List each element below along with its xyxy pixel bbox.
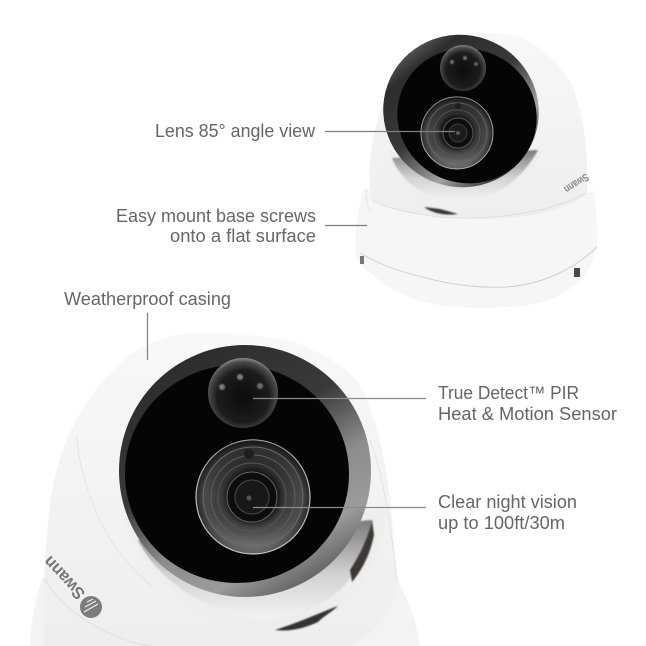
large metal ring — [119, 345, 371, 597]
leader line: weatherproof casing — [146, 313, 148, 360]
Swann logo on large camera: Swann — [40, 552, 89, 603]
brand text on small camera: Swann — [561, 170, 591, 195]
large PIR sensor dome — [208, 358, 278, 428]
camera lens — [421, 97, 493, 169]
PIR sensor dome — [440, 45, 486, 91]
large housing lower band — [126, 510, 385, 636]
large camera mount base — [30, 577, 420, 646]
leader line: lens angle — [325, 130, 455, 132]
metal ring — [362, 13, 560, 209]
large black lens panel — [125, 365, 349, 583]
large camera lens — [196, 440, 310, 554]
label: easy mount base: onto a flat surface — [170, 226, 316, 246]
label: easy mount base: Easy mount base screws — [116, 206, 316, 226]
dome shell — [369, 33, 587, 219]
label: lens angle: Lens 85° angle view — [155, 121, 316, 141]
label: night vision — [438, 492, 577, 533]
large dome shell — [44, 333, 397, 646]
leader line: PIR sensor — [253, 398, 426, 400]
camera mount base — [355, 187, 597, 308]
label: PIR sensor: True Detect™ PIR — [438, 383, 579, 403]
black lens panel — [378, 29, 556, 203]
small dome camera — [355, 13, 597, 308]
leader line: night vision — [253, 506, 426, 508]
label: PIR sensor: Heat & Motion Sensor — [438, 404, 617, 424]
lens housing lower band — [388, 150, 543, 211]
label: night vision: up to 100ft/30m — [438, 513, 565, 533]
label: night vision: Clear night vision — [438, 492, 577, 512]
leader line: mount base — [325, 224, 367, 226]
Swann logo on large camera — [40, 552, 102, 618]
large dome camera — [30, 333, 420, 646]
label: easy mount base — [116, 206, 316, 246]
label: PIR sensor — [438, 383, 617, 424]
label: weatherproof casing: Weatherproof casing — [64, 289, 231, 309]
